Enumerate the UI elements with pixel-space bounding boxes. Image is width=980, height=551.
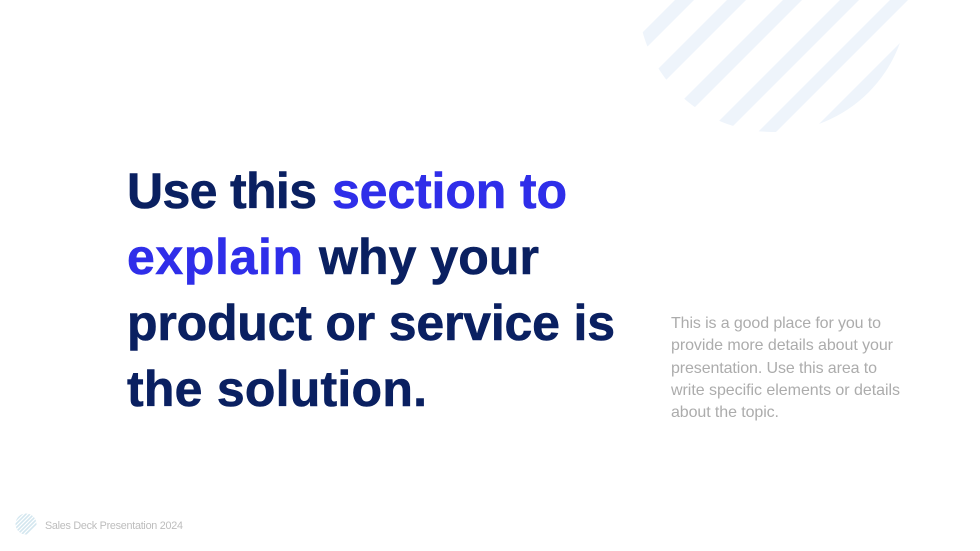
decorative striped circle, top right [643,0,908,132]
heading [127,163,615,417]
heading: the solution. [127,361,427,417]
heading: why your [318,229,539,285]
body text block: presentation. Use this area to [671,360,877,377]
heading: product or service is [127,295,615,351]
body text block: write specific elements or details [670,382,900,399]
body text block [670,315,900,421]
icon: footer striped circle [16,514,36,534]
footer label: Sales Deck Presentation 2024 [45,520,183,532]
body text block: provide more details about your [671,337,894,354]
body text block: about the topic. [671,404,779,421]
heading: section to [332,163,567,219]
heading: explain [127,229,303,285]
body text block: This is a good place for you to [671,315,881,332]
heading: Use this [127,163,317,219]
